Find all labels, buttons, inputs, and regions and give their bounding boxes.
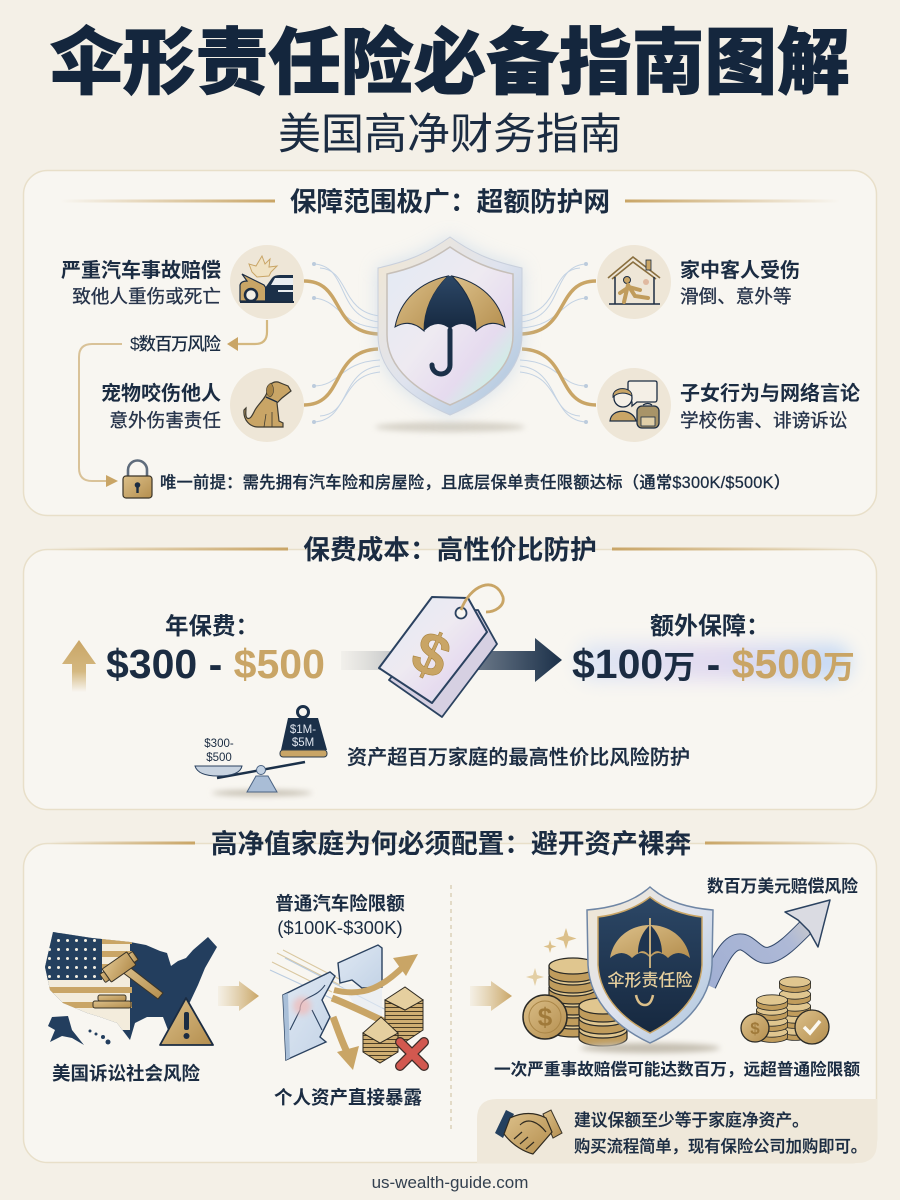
annual premium: $300 - $500 xyxy=(106,641,325,687)
icon: coins left xyxy=(523,928,627,1046)
item: car accident: 严重汽车事故赔偿 xyxy=(61,258,221,282)
label: auto limit xyxy=(275,893,405,938)
icon: coins right: $ xyxy=(750,1019,760,1038)
icon: coins right xyxy=(741,977,829,1044)
heading: coverage xyxy=(60,187,840,217)
icon: balance scale xyxy=(195,706,327,796)
icon: liability shield: 伞形责任险 xyxy=(608,971,692,990)
icon: broken wall with exposed assets xyxy=(270,945,424,1070)
label: assets exposed: 个人资产直接暴露 xyxy=(274,1087,422,1108)
icon: coins left: $ xyxy=(538,1002,553,1032)
item: guest injury: 滑倒、意外等 xyxy=(680,286,792,307)
item: pet bite xyxy=(101,368,304,442)
icon: liability shield xyxy=(580,887,720,1053)
icon: balance scale: $500 xyxy=(206,752,232,764)
footer source: us-wealth-guide.com xyxy=(372,1173,528,1192)
icon: umbrella shield xyxy=(375,237,525,432)
arrow: step one xyxy=(218,981,259,1011)
subtitle: 美国高净财务指南 xyxy=(278,111,622,159)
callout: recommendation xyxy=(477,1099,877,1163)
icon: balance scale: $5M xyxy=(292,737,314,749)
item: pet bite: 宠物咬伤他人 xyxy=(101,381,221,405)
title: 伞形责任险必备指南图解 xyxy=(50,23,850,104)
heading: why xyxy=(50,829,850,859)
label: auto limit: 普通汽车险限额 xyxy=(275,893,405,914)
arrow: rising risk xyxy=(708,900,830,985)
extra coverage xyxy=(572,613,855,687)
panel: why high-net-worth families need it xyxy=(24,829,877,1163)
connectors to shield xyxy=(304,262,596,424)
arrow: premium to coverage xyxy=(341,638,562,682)
item: car accident: 致他人重伤或死亡 xyxy=(72,286,221,307)
item: guest injury xyxy=(597,245,800,319)
annual premium: 年保费： xyxy=(165,613,259,639)
item: children and online speech: 子女行为与网络言论 xyxy=(680,381,860,405)
callout: recommendation: 购买流程简单，现有保险公司加购即可。 xyxy=(574,1138,867,1156)
heading: coverage: 保障范围极广：超额防护网 xyxy=(290,187,610,217)
item: guest injury: 家中客人受伤 xyxy=(680,258,800,282)
icon: handshake xyxy=(495,1110,562,1154)
heading: why: 高净值家庭为何必须配置：避开资产裸奔 xyxy=(211,829,691,859)
heading: premium cost: 保费成本：高性价比防护 xyxy=(303,535,597,565)
annual premium xyxy=(62,613,325,692)
prerequisite note: 唯一前提：需先拥有汽车险和房屋险，且底层保单责任限额达标（通常$300K/$500K） xyxy=(160,474,790,492)
callout: recommendation: 建议保额至少等于家庭净资产。 xyxy=(574,1110,809,1130)
icon: lock xyxy=(123,461,152,498)
heading: premium cost xyxy=(50,535,850,565)
panel: premium cost xyxy=(24,535,876,810)
label: auto limit: ($100K-$300K) xyxy=(277,917,403,938)
value note: 资产超百万家庭的最高性价比风险防护 xyxy=(347,746,690,769)
item: pet bite: 意外伤害责任 xyxy=(109,410,221,431)
label: litigation risk: 美国诉讼社会风险 xyxy=(52,1063,200,1084)
risk label with arrows xyxy=(79,320,267,487)
extra coverage: $100万 - $500万 xyxy=(572,641,855,687)
panel: coverage xyxy=(24,170,876,516)
item: children and online speech xyxy=(597,368,860,442)
note: claim amount: 一次严重事故赔偿可能达数百万，远超普通险限额 xyxy=(494,1059,860,1079)
item: car accident xyxy=(61,245,304,319)
divider xyxy=(450,885,452,1130)
label: multimillion risk: 数百万美元赔偿风险 xyxy=(707,876,858,896)
arrow: step two xyxy=(470,981,512,1011)
icon: US map with gavel and warning xyxy=(40,925,217,1045)
icon: balance scale: $1M- xyxy=(290,724,316,736)
risk label with arrows: $数百万风险 xyxy=(130,334,222,354)
item: children and online speech: 学校伤害、诽谤诉讼 xyxy=(680,410,847,431)
icon: balance scale: $300- xyxy=(204,738,234,750)
extra coverage: 额外保障： xyxy=(650,613,770,640)
icon: price tag xyxy=(379,585,503,717)
icon: price tag: $ xyxy=(402,617,460,692)
